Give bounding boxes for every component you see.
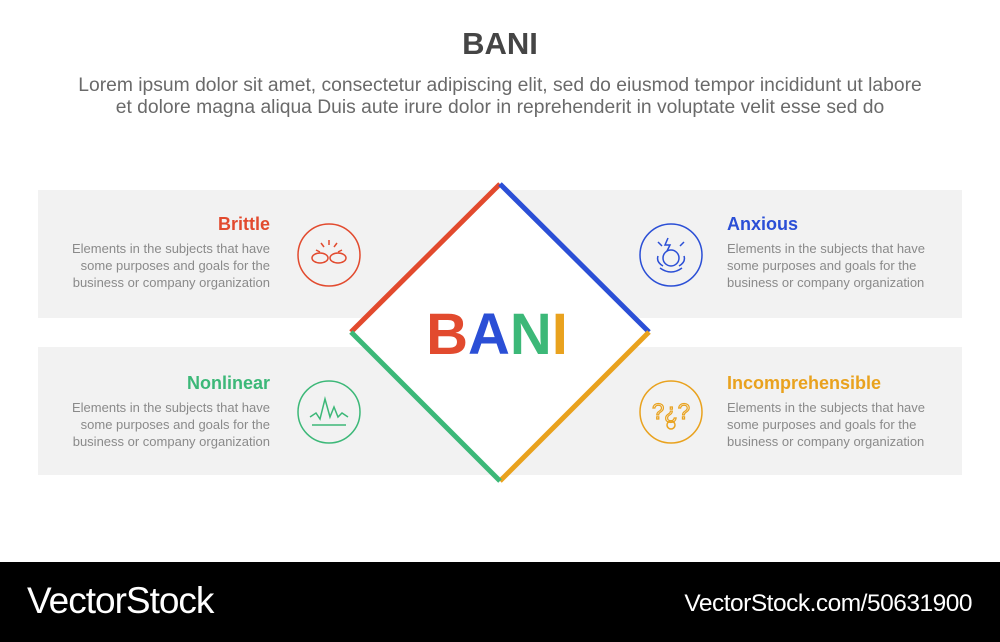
text: incomprehensible: Incomprehensible — [727, 373, 881, 393]
subtitle: et dolore magna aliqua Duis aute irure dolor in reprehenderit in voluptate velit esse sed do — [116, 97, 884, 118]
text: brittle: some purposes and goals for the — [81, 258, 270, 273]
icon: incomprehensible: ?¿? — [652, 399, 690, 424]
text: incomprehensible: business or company organization — [727, 434, 924, 449]
text: nonlinear: Nonlinear — [187, 373, 270, 393]
text: brittle — [72, 214, 270, 290]
icon: anxious — [639, 223, 703, 287]
text: incomprehensible: some purposes and goals for the — [727, 417, 916, 432]
text: incomprehensible: Elements in the subjects that have — [727, 400, 925, 415]
text: brittle: Brittle — [218, 214, 270, 234]
text: nonlinear: business or company organization — [73, 434, 270, 449]
text: anxious — [727, 214, 925, 290]
icon: nonlinear — [297, 380, 361, 444]
footer url: VectorStock.com/50631900 — [684, 590, 972, 617]
text: anxious: some purposes and goals for the — [727, 258, 916, 273]
subtitle — [78, 75, 922, 118]
text: anxious: business or company organization — [727, 275, 924, 290]
text: brittle: Elements in the subjects that have — [72, 241, 270, 256]
icon: incomprehensible — [639, 380, 703, 444]
text: anxious: Anxious — [727, 214, 798, 234]
panel: top band — [38, 190, 962, 318]
subtitle: Lorem ipsum dolor sit amet, consectetur adipiscing elit, sed do eiusmod tempor incididunt ut labore — [78, 75, 922, 96]
text: incomprehensible — [727, 373, 925, 449]
text: nonlinear — [72, 373, 270, 449]
text: anxious: Elements in the subjects that have — [727, 241, 925, 256]
footer logo: VectorStock — [27, 580, 213, 621]
footer — [0, 562, 1000, 642]
icon: brittle — [297, 223, 361, 287]
text: nonlinear: some purposes and goals for the — [81, 417, 270, 432]
diamond: BANI — [426, 302, 568, 367]
text: brittle: business or company organization — [73, 275, 270, 290]
panel: bottom band — [38, 347, 962, 475]
text: nonlinear: Elements in the subjects that have — [72, 400, 270, 415]
title: BANI — [462, 26, 538, 61]
